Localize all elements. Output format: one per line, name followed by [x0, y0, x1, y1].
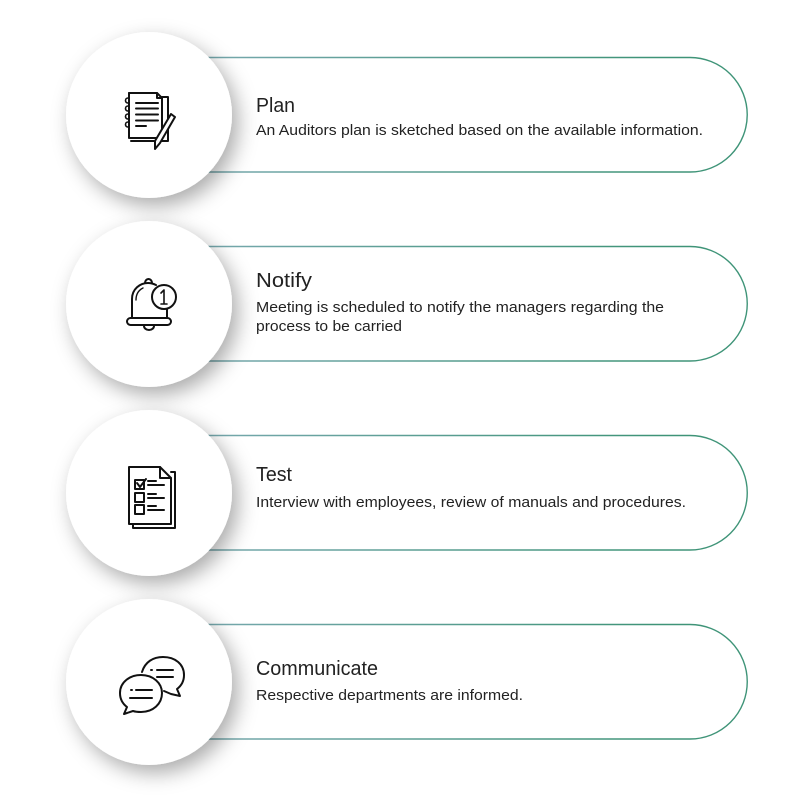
heading: test: Test	[256, 464, 292, 486]
icon circle: communicate	[66, 599, 232, 765]
pill outline: communicate	[205, 624, 747, 739]
text: notify description line 2: process to be carried	[256, 318, 402, 335]
heading: notify: Notify	[256, 270, 312, 292]
icon: notebook and pencil	[126, 93, 175, 149]
icon circle: test	[66, 410, 232, 576]
panel: communicate	[66, 599, 747, 765]
text: plan description: An Auditors plan is sketched based on the available information.	[256, 122, 703, 139]
panel: notify	[66, 221, 747, 387]
icon: speech bubbles	[120, 657, 184, 714]
icon: checklist document	[129, 467, 175, 528]
panel: plan	[66, 32, 747, 198]
icon: bell with badge	[127, 279, 176, 330]
icon circle: notify	[66, 221, 232, 387]
text: test description: Interview with employees, review of manuals and procedures.	[256, 494, 686, 511]
heading: plan: Plan	[256, 95, 295, 117]
text: notify description: Meeting is scheduled to notify the managers regarding the	[256, 299, 664, 316]
text: communicate description: Respective departments are informed.	[256, 687, 523, 704]
pill outline: test	[205, 436, 747, 550]
heading: communicate: Communicate	[256, 658, 378, 680]
icon circle: plan	[66, 32, 232, 198]
pill outline: plan	[205, 58, 747, 172]
panel: test	[66, 410, 747, 576]
pill outline: notify	[205, 246, 747, 361]
